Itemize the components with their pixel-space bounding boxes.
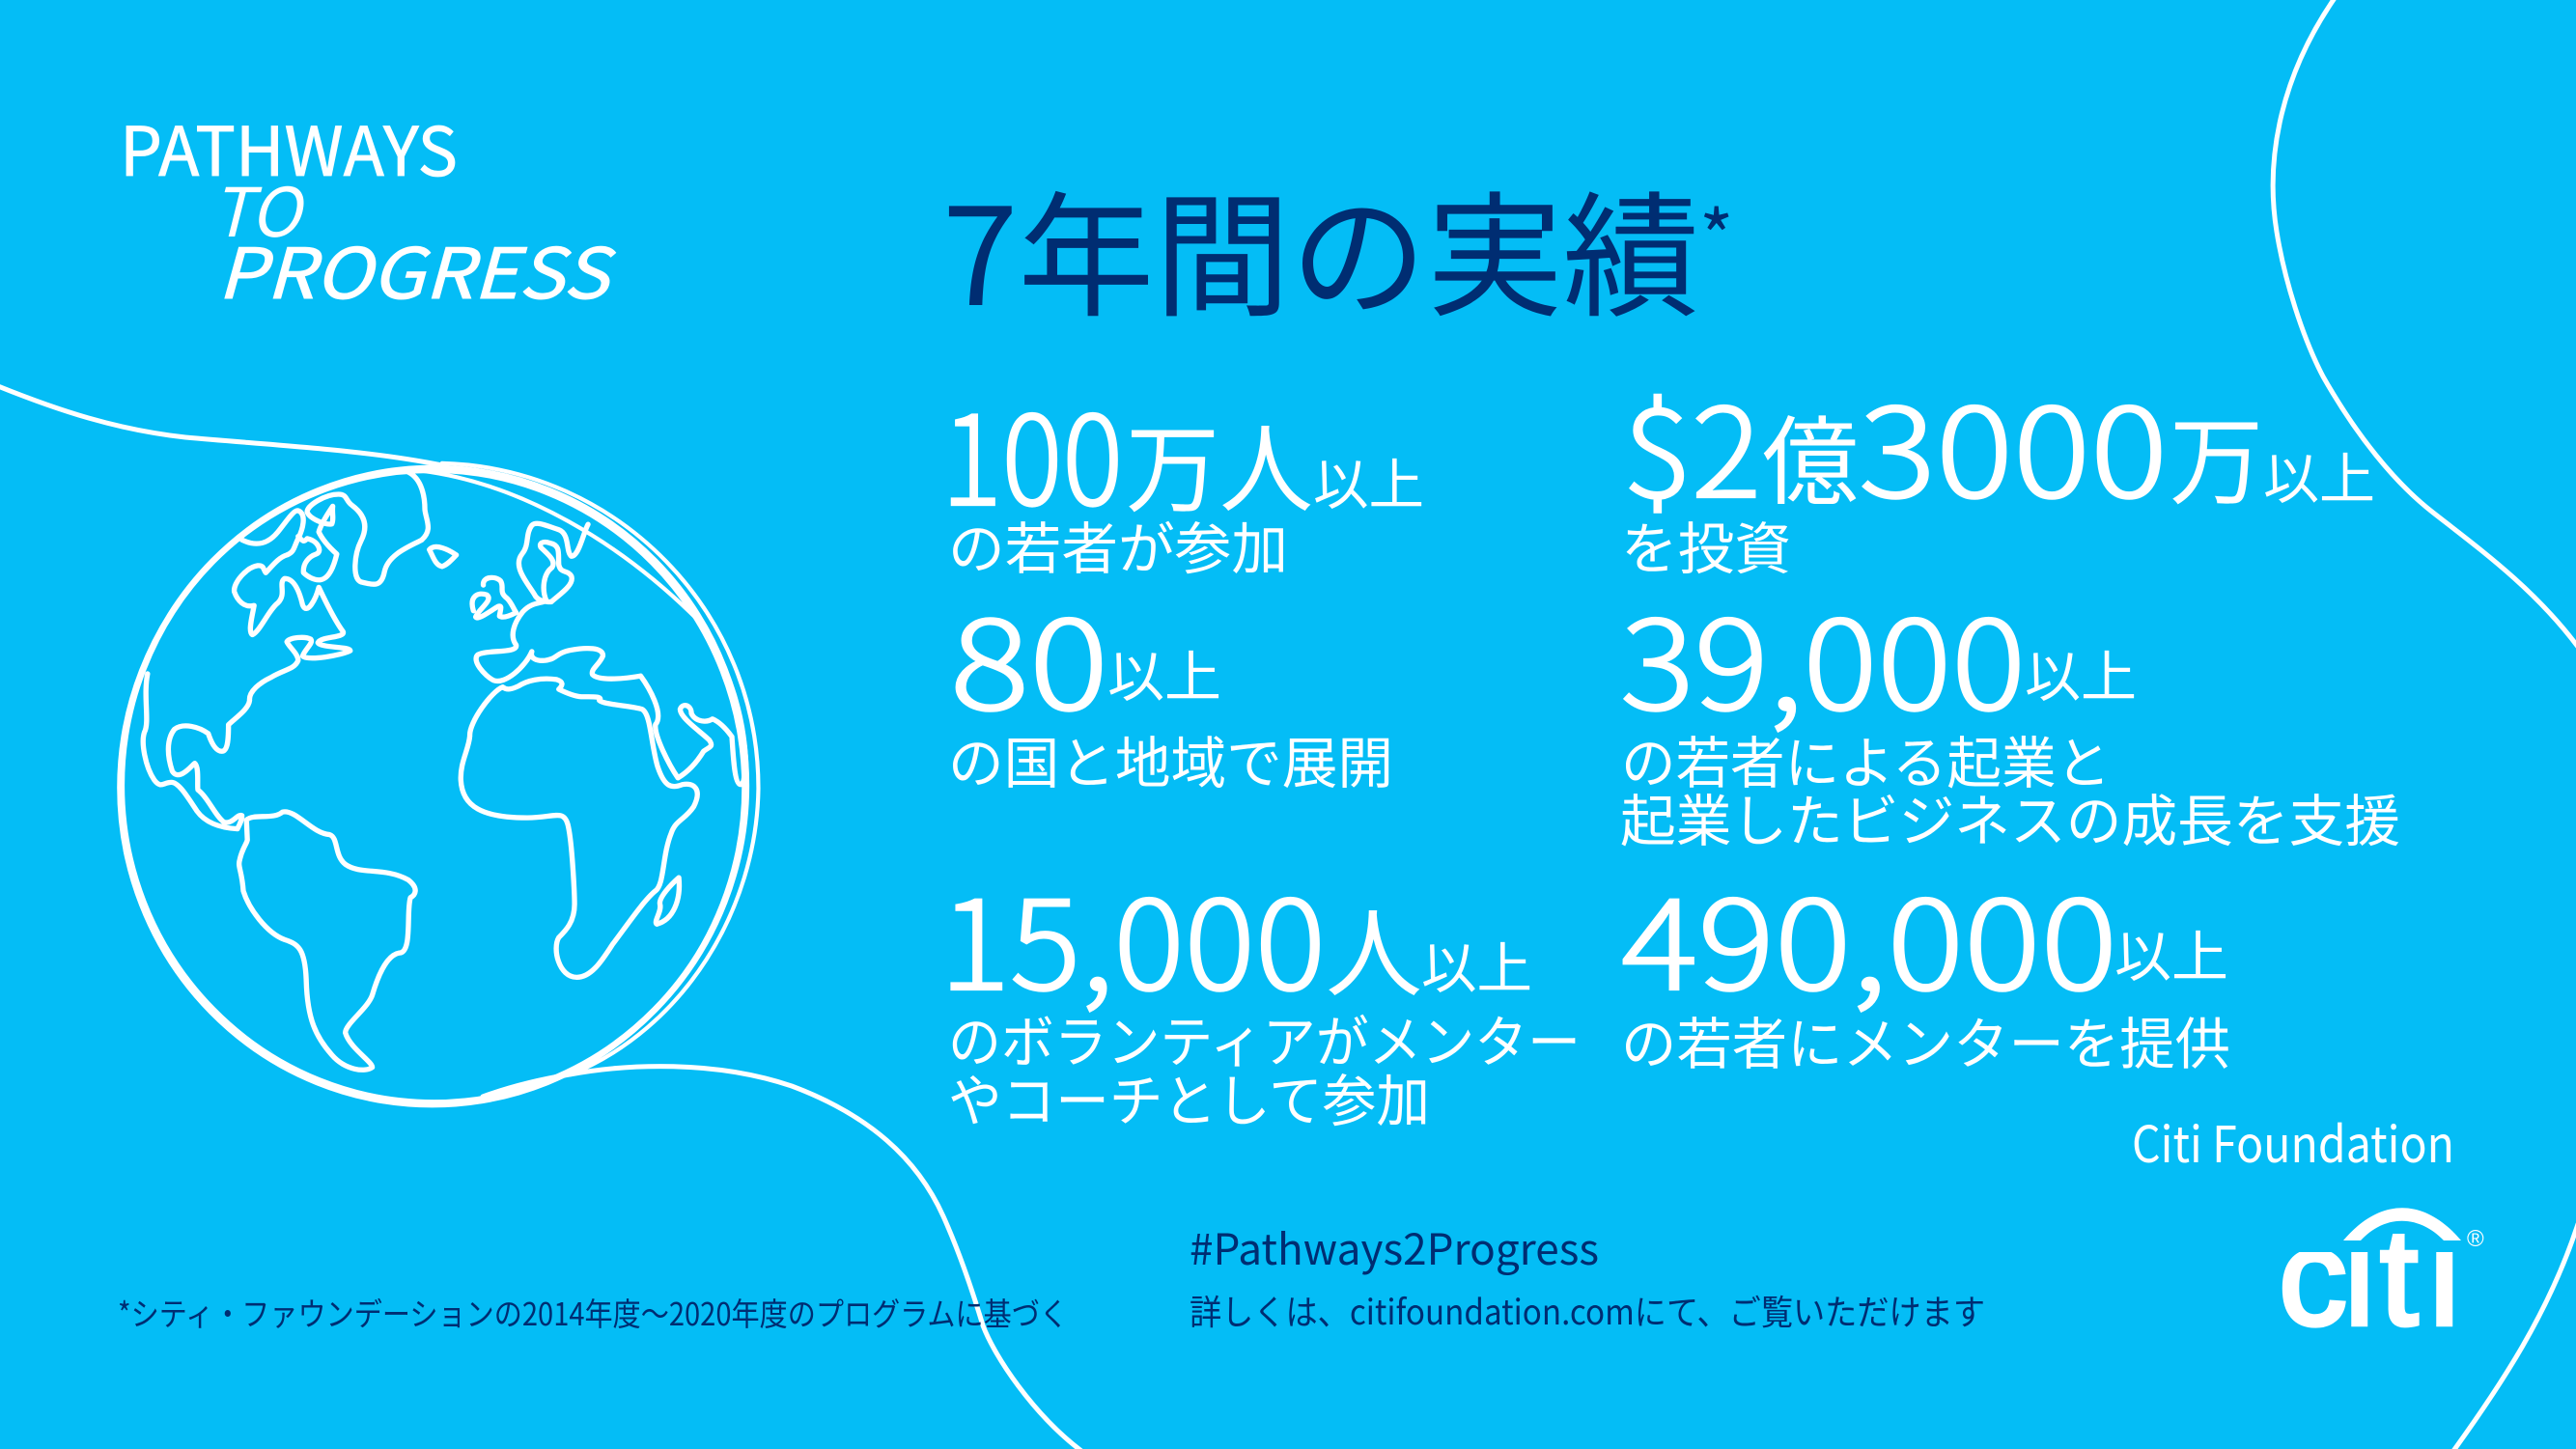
stat: volunteers: やコーチとして参加 <box>948 1056 1430 1137</box>
stat: entrepreneurs: の若者による起業と <box>1621 718 2111 799</box>
stat: volunteers: 15,000 <box>939 847 1326 1025</box>
hashtag: #Pathways2Progress <box>1190 1215 1599 1277</box>
stat: mentored youth: 490,000 <box>1621 847 2117 1025</box>
logo: citi: citi <box>2279 1201 2460 1354</box>
stat: 1 million youth: 100 <box>941 362 1123 541</box>
stat: entrepreneurs <box>1620 567 2400 857</box>
Greenland and Arctic islands <box>298 472 428 584</box>
decorative curve: upper right <box>2273 0 2576 647</box>
logo: citi: ® <box>2467 1226 2484 1252</box>
decorative curve: below globe to bottom edge <box>483 1067 1081 1449</box>
stat: 1 million youth: の若者が参加 <box>948 504 1288 585</box>
Madagascar <box>656 878 679 924</box>
stat: mentored youth <box>1621 847 2230 1080</box>
Iceland <box>430 546 457 567</box>
stat: volunteers: 人 <box>1326 877 1422 1017</box>
stat: mentored youth: 以上 <box>2114 913 2228 992</box>
stat: volunteers: のボランティアがメンター <box>948 997 1581 1078</box>
logo: citi <box>2282 1208 2483 1328</box>
text: Citi Foundation: Citi Foundation <box>2132 1104 2454 1177</box>
logo: Pathways to Progress: PROGRESS <box>217 217 616 319</box>
stat: entrepreneurs: 39,000 <box>1620 567 2026 745</box>
logo: Pathways to Progress: TO <box>211 159 307 257</box>
stat: 1 million youth: 万人 <box>1126 392 1313 532</box>
South America <box>239 812 415 1070</box>
website note: 詳しくは、citifoundation.comにて、ご覧いただけます <box>1190 1285 1985 1335</box>
North America <box>143 511 350 829</box>
stat: entrepreneurs: 起業したビジネスの成長を支援 <box>1620 776 2400 857</box>
stat: 1 million youth: 以上 <box>1313 441 1424 520</box>
stat: investment: を投資 <box>1621 504 1791 585</box>
decorative curve: lower right <box>2453 1224 2576 1449</box>
British Isles <box>472 577 517 618</box>
stat: investment <box>1621 354 2375 585</box>
stat: investment: 億 <box>1762 384 1859 524</box>
Africa <box>461 679 697 977</box>
title: * <box>1699 180 1734 286</box>
decorative curve: top left into globe <box>0 386 442 465</box>
stat: 1 million youth <box>941 362 1424 585</box>
stat: countries: の国と地域で展開 <box>948 718 1393 799</box>
icon: globe <box>120 463 758 1105</box>
stat: investment: 3000 <box>1859 354 2168 533</box>
stat: mentored youth: の若者にメンターを提供 <box>1621 999 2230 1080</box>
stat: volunteers: 以上 <box>1421 925 1532 1004</box>
Europe and Asia <box>476 523 745 785</box>
stat: countries <box>948 567 1393 799</box>
stat: entrepreneurs: 以上 <box>2025 633 2137 712</box>
stat: countries: 以上 <box>1107 633 1221 712</box>
stat: countries: 80 <box>950 567 1108 745</box>
stat: investment: 以上 <box>2263 435 2375 515</box>
logo: Pathways to Progress <box>120 98 616 319</box>
stat: volunteers <box>939 847 1581 1137</box>
stat: investment: $2 <box>1622 354 1761 533</box>
title: 7年間の実績 <box>942 150 1699 345</box>
logo: Pathways to Progress: PATHWAYS <box>120 98 458 196</box>
footnote: *シティ・ファウンデーションの2014年度～2020年度のプログラムに基づく <box>118 1289 1068 1335</box>
stat: investment: 万 <box>2170 384 2263 524</box>
